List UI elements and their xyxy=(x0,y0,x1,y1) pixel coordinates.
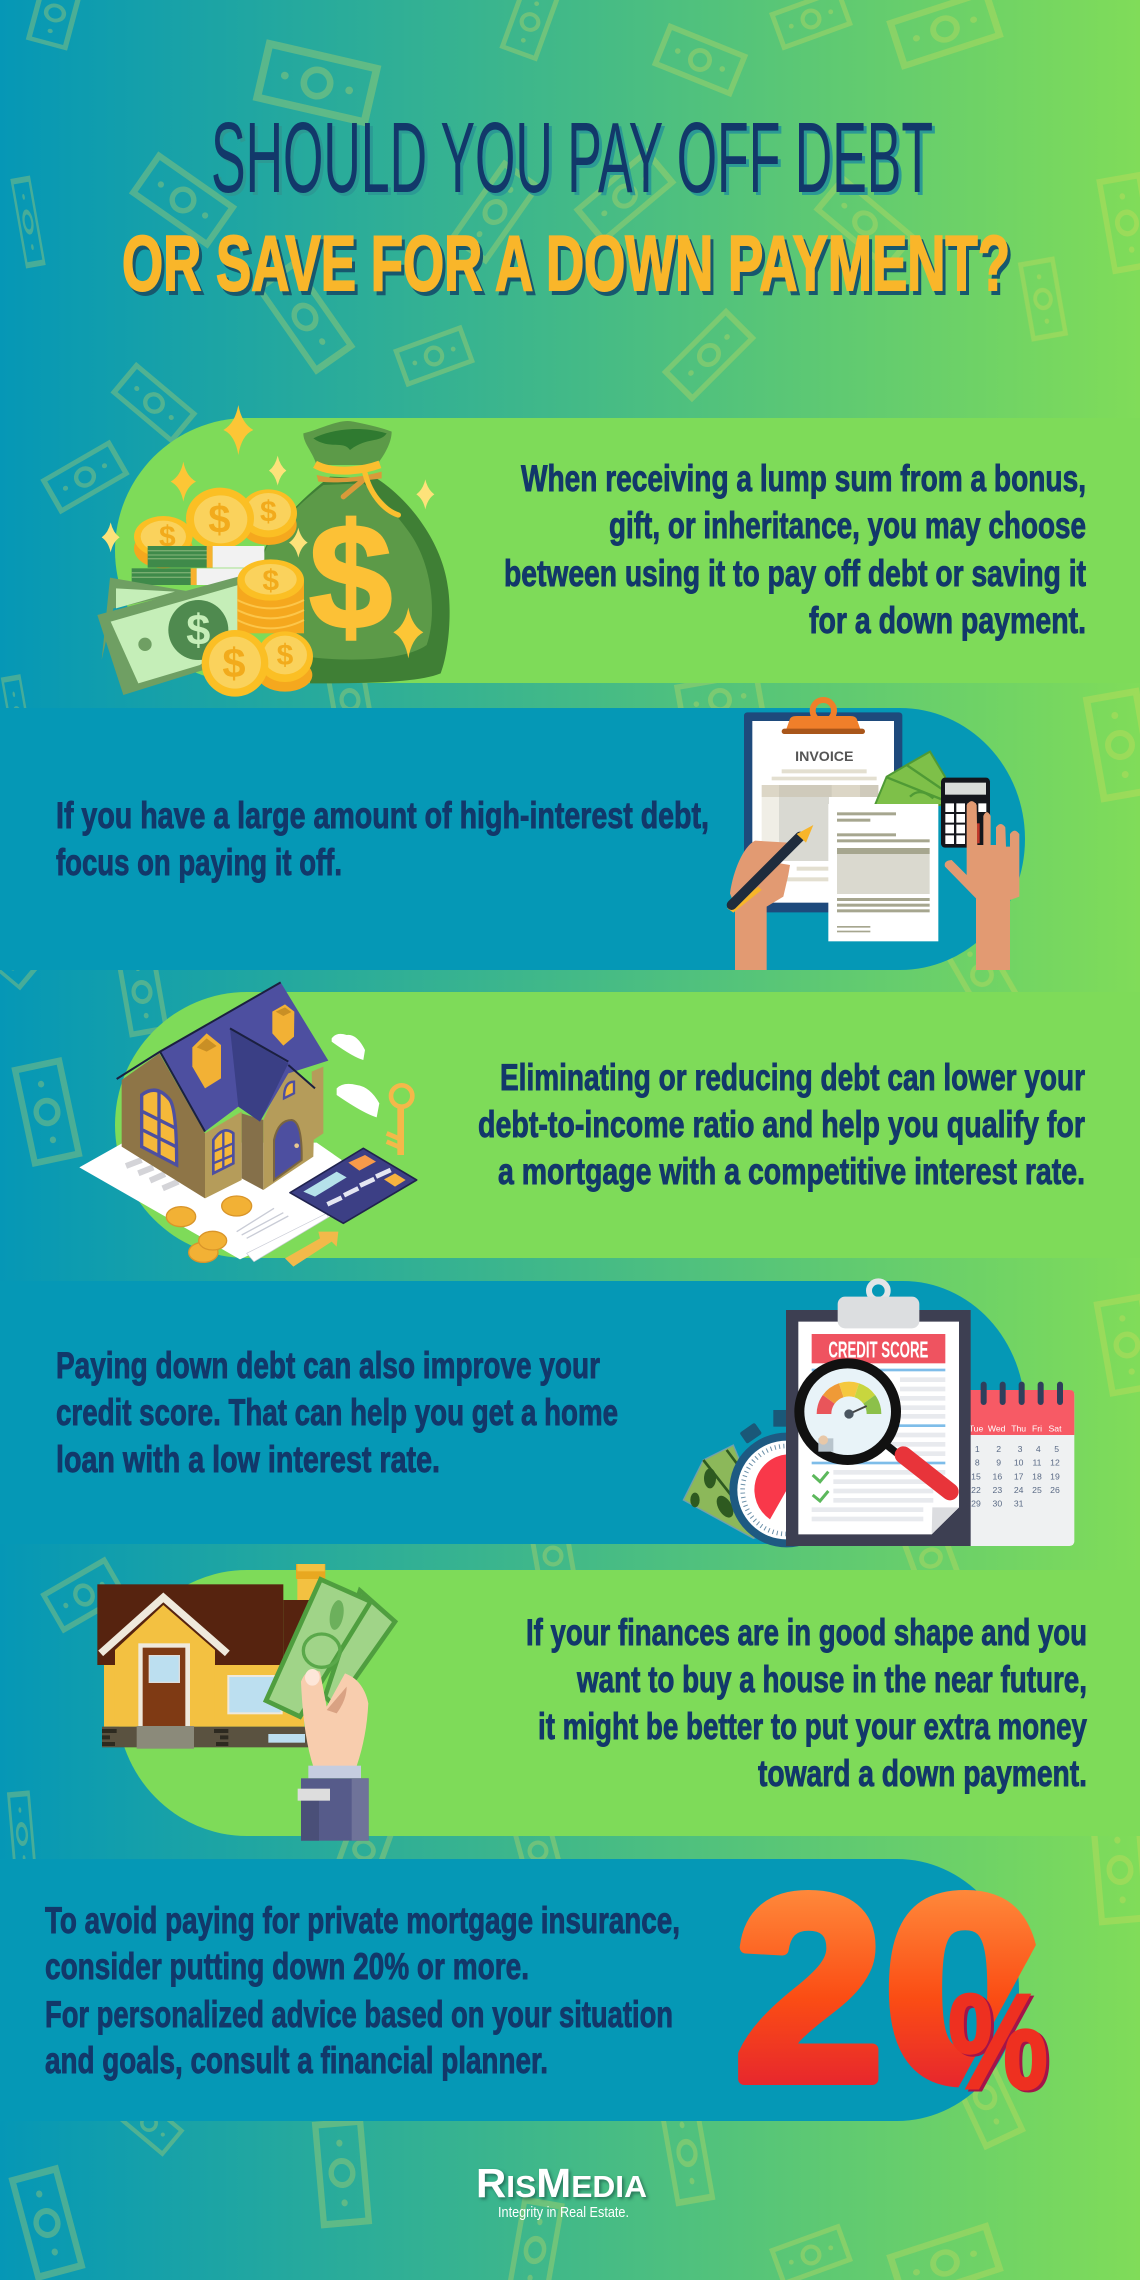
calendar: 3 xyxy=(1018,1444,1023,1454)
back coins xyxy=(134,488,297,568)
logo: RISMedia xyxy=(476,2160,647,2221)
calendar: 31 xyxy=(1014,1499,1024,1509)
right hand xyxy=(945,801,1019,970)
key xyxy=(387,1085,412,1155)
calendar: 5 xyxy=(1054,1444,1059,1454)
panel 2 text: If you have a large amount of high-interest debt, xyxy=(56,795,709,836)
logo wordmark: RISMEDIA xyxy=(476,2160,647,2206)
calendar: 4 xyxy=(1036,1444,1041,1454)
magnifying glass xyxy=(799,1363,950,1492)
coin stacks: $ xyxy=(262,565,279,598)
calendar: 10 xyxy=(1014,1458,1024,1468)
panel 5 background xyxy=(117,1570,1140,1836)
calendar: 15 xyxy=(971,1471,981,1481)
calendar: 24 xyxy=(1014,1485,1024,1495)
clipboard: CREDIT SCORE xyxy=(828,1336,928,1362)
walls xyxy=(122,1053,323,1198)
panel 1: lump sum xyxy=(97,405,1140,697)
calendar: 30 xyxy=(993,1499,1002,1509)
logo tagline: Integrity in Real Estate. xyxy=(498,2204,629,2221)
calendar: 16 xyxy=(993,1471,1002,1481)
panel 6 background xyxy=(0,1859,1019,2121)
calendar: 17 xyxy=(1014,1471,1024,1481)
calendar: 2 xyxy=(996,1444,1001,1454)
calendar: Sat xyxy=(1048,1424,1062,1434)
panel 6: 20 percent xyxy=(0,1842,1051,2135)
panel 2 text: focus on paying it off. xyxy=(56,842,342,883)
clipboard: INVOICE xyxy=(795,748,853,764)
panel 6 text: and goals, consult a financial planner. xyxy=(45,2040,548,2081)
panel 2 text xyxy=(56,795,709,883)
panel 2: high-interest debt xyxy=(0,700,1025,970)
calendar: 26 xyxy=(1050,1485,1060,1495)
coin stacks xyxy=(202,559,313,697)
coin stacks: $ xyxy=(277,639,294,672)
banknotes xyxy=(875,752,945,805)
clouds xyxy=(332,1034,379,1117)
calendar: 1 xyxy=(975,1444,980,1454)
calendar: 22 xyxy=(971,1485,981,1495)
banknotes xyxy=(97,577,238,695)
chimneys xyxy=(192,1004,294,1088)
panel 4 text xyxy=(56,1345,618,1480)
calendar: 12 xyxy=(1050,1458,1060,1468)
panel 1 background xyxy=(115,418,1140,683)
hand and sleeve xyxy=(298,1669,369,1841)
panel 6 text: To avoid paying for private mortgage insurance, xyxy=(45,1900,680,1941)
coin stacks: $ xyxy=(222,639,246,686)
calendar: Wed xyxy=(988,1424,1006,1434)
panel 4 text: loan with a low interest rate. xyxy=(56,1439,440,1480)
calendar: Fri xyxy=(1032,1424,1042,1434)
calendar: 29 xyxy=(971,1499,981,1509)
calendar: Tue xyxy=(969,1424,983,1434)
panel 6 text: For personalized advice based on your situation xyxy=(45,1994,673,2035)
left hand with pen xyxy=(727,825,813,970)
stopwatch xyxy=(729,1410,844,1547)
icon: money bag with coins and cash xyxy=(97,405,450,697)
money bag xyxy=(262,421,450,683)
icon: isometric house, card and key xyxy=(79,982,417,1267)
panel 1 text xyxy=(504,458,1086,641)
panel 4 text: Paying down debt can also improve your xyxy=(56,1345,600,1386)
calendar: 19 xyxy=(1050,1471,1060,1481)
coins xyxy=(166,1196,252,1262)
panel 3 background xyxy=(115,992,1140,1258)
icon: credit score clipboard, stopwatch and calendar xyxy=(683,1281,1074,1547)
panel 3: debt to income xyxy=(79,982,1140,1267)
panel 4 background xyxy=(0,1281,1025,1544)
clipboard xyxy=(744,700,902,912)
icon: invoice on clipboard with hands xyxy=(727,700,1019,970)
title xyxy=(122,102,1013,311)
calendar: 18 xyxy=(1032,1471,1042,1481)
back coins: $ xyxy=(260,496,277,529)
graphic: 20%: % xyxy=(951,1968,1051,2119)
document xyxy=(828,804,938,941)
back coins: $ xyxy=(159,521,176,554)
windows and door xyxy=(142,1082,302,1180)
panel 6 text: consider putting down 20% or more. xyxy=(45,1946,529,1987)
panel 2 background xyxy=(0,708,1025,970)
calendar: Thu xyxy=(1011,1424,1026,1434)
paper xyxy=(79,1143,342,1262)
calendar: 25 xyxy=(1032,1485,1042,1495)
graphic: 20%: 0 xyxy=(884,1842,1046,2135)
calendar: 9 xyxy=(996,1458,1001,1468)
clipboard xyxy=(786,1281,971,1546)
banknotes xyxy=(266,1579,395,1717)
arrow xyxy=(285,1232,338,1267)
money bag: $ xyxy=(309,492,392,660)
panel 3 text xyxy=(478,1057,1085,1192)
calendar: 23 xyxy=(993,1485,1002,1495)
sparkles xyxy=(102,405,434,658)
panel 5 text xyxy=(526,1612,1087,1794)
banknotes: $ xyxy=(186,607,210,655)
calendar: 11 xyxy=(1032,1458,1042,1468)
panel 5: buy in near future xyxy=(97,1564,1140,1841)
calendar: 8 xyxy=(975,1458,980,1468)
roof xyxy=(117,982,328,1132)
graphic: 20%: 2 xyxy=(735,1842,883,2135)
panel 4: credit score xyxy=(0,1281,1074,1547)
credit gauge xyxy=(824,1389,874,1414)
calendar xyxy=(937,1382,1074,1546)
banknotes xyxy=(683,1445,770,1538)
calculator xyxy=(941,778,990,848)
graphic: 20% xyxy=(738,1890,1050,2092)
panel 6 text xyxy=(45,1900,680,2081)
panel 4 text: credit score. That can help you get a home xyxy=(56,1392,618,1433)
cash stacks xyxy=(132,546,264,585)
house xyxy=(97,1564,367,1749)
back coins: $ xyxy=(208,498,230,542)
credit card xyxy=(290,1148,417,1223)
icon: house and hand holding cash xyxy=(97,1564,395,1841)
graphic: 20%: % xyxy=(948,1966,1048,2117)
